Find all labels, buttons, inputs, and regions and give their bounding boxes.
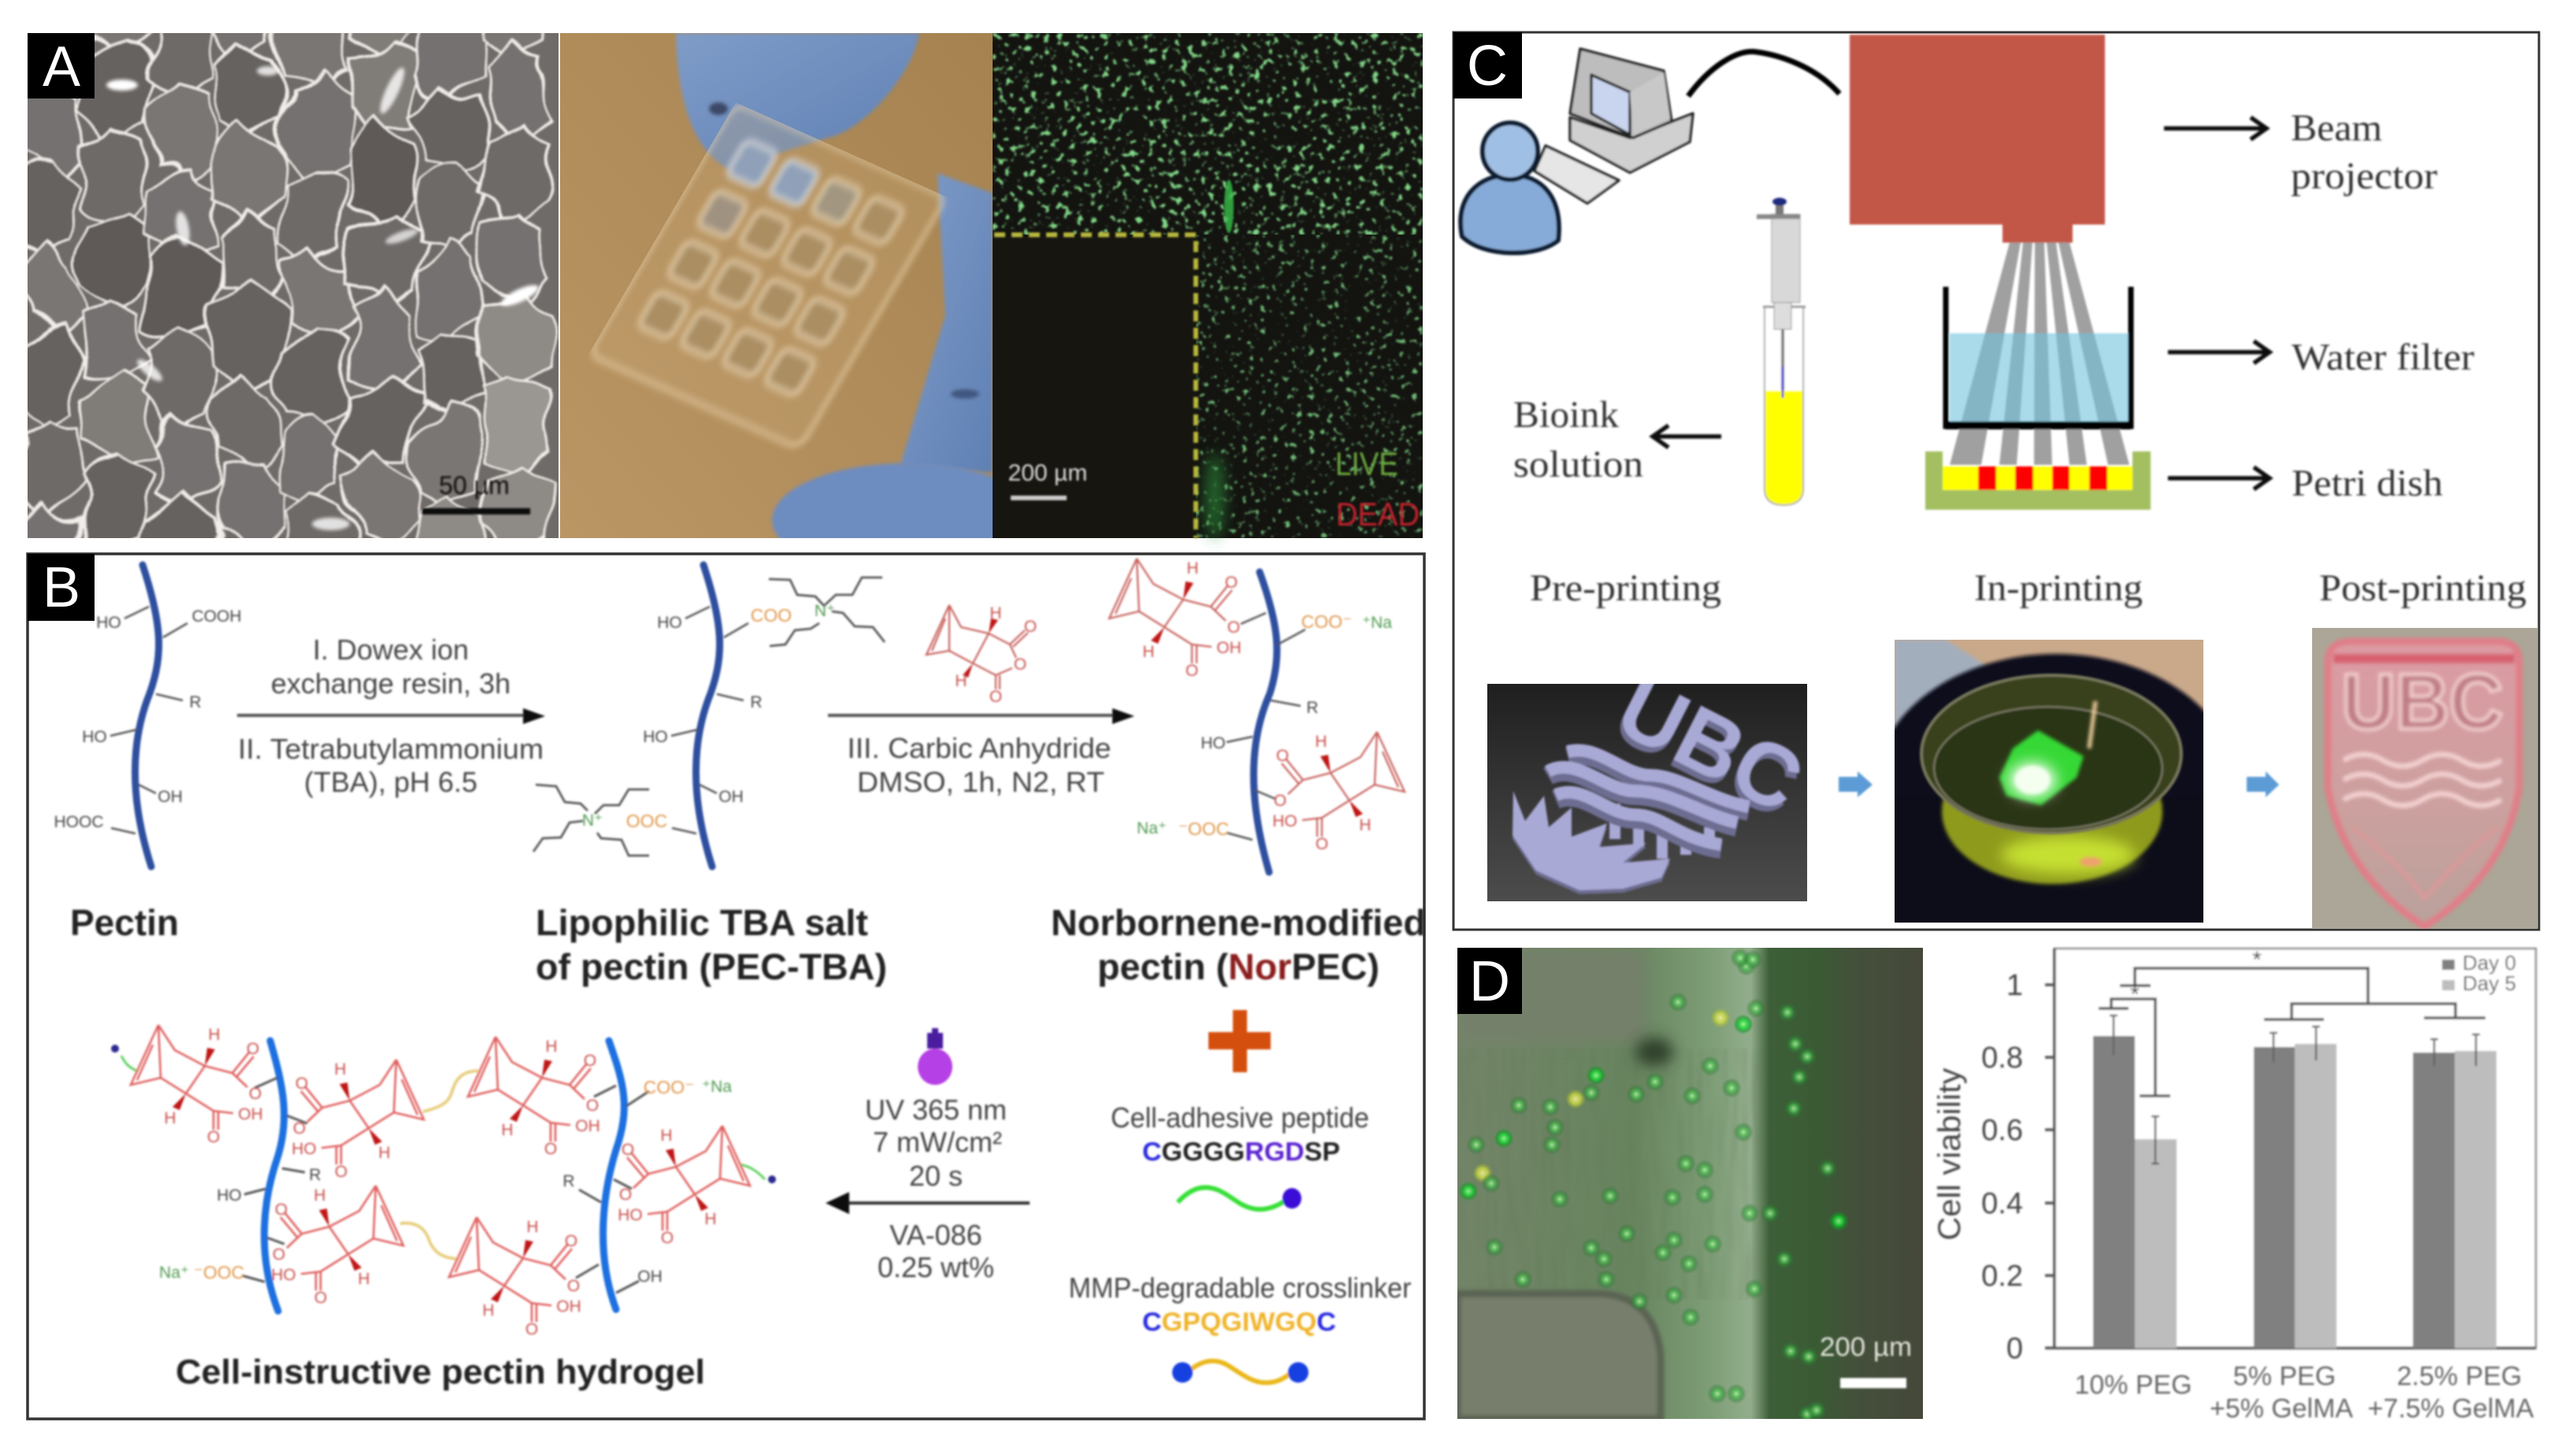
- bars: 2.5% PEG + 7.5% GelMA: [2413, 1051, 2496, 1348]
- pectin chain: [54, 565, 241, 867]
- NorPEC chain: HO: [1201, 734, 1226, 752]
- UV conditions: 7 mW/cm²: [873, 1126, 1002, 1158]
- conditions I and II: [238, 633, 544, 798]
- hydrogel labels 4: O: [619, 1186, 632, 1204]
- side group labels: [159, 1077, 732, 1286]
- MMP-degradable crosslinker: CGPQGIWGQC: [1142, 1307, 1336, 1336]
- MMP-degradable crosslinker: MMP-degradable crosslinker: [1068, 1272, 1412, 1304]
- significance brackets: [2099, 968, 2485, 1096]
- hydrogel molecule 1: [131, 1025, 254, 1130]
- SEM micrograph of hydrogel: [28, 33, 559, 538]
- norbornene labels upper: H: [1142, 643, 1155, 661]
- heading PEC-TBA: [536, 902, 887, 987]
- norbornene labels lower: HO: [1272, 812, 1297, 830]
- pectin chain: OH: [158, 788, 183, 806]
- hydrogel labels 1: H: [164, 1109, 176, 1127]
- reaction arrow 1: [237, 708, 545, 724]
- label D: [1457, 948, 1522, 1014]
- NorPEC chain: Na⁺: [1137, 819, 1167, 837]
- label Petri dish: Petri dish: [2292, 462, 2443, 504]
- label Water filter: Water filter: [2292, 336, 2474, 378]
- arrow to Water filter: [2168, 341, 2270, 363]
- carbic anhydride molecule: [926, 604, 1037, 706]
- icon: UV bulb: [918, 1028, 952, 1085]
- heading PEC-TBA: Lipophilic TBA salt: [536, 902, 868, 943]
- norbornene labels lower: O: [1316, 835, 1328, 853]
- cable: [1688, 52, 1839, 96]
- UV conditions: 20 s: [909, 1160, 963, 1192]
- hydrogel labels 3: O: [586, 1097, 599, 1115]
- category labels: 10% PEG: [2075, 1370, 2192, 1400]
- norbornene labels lower: O: [1274, 792, 1286, 810]
- hydrogel labels 2: [291, 1060, 391, 1181]
- scale label 200 µm: 200 µm: [1008, 460, 1087, 486]
- beam projector: [1850, 35, 2105, 243]
- hydrogel labels 3: [501, 1038, 600, 1158]
- panel B frame: [28, 554, 1424, 1419]
- norbornene molecule lower: [1282, 732, 1405, 837]
- pectin chain: HO: [96, 614, 121, 632]
- hydrogel labels 6: O: [567, 1277, 580, 1295]
- norbornene labels lower: H: [1359, 816, 1372, 834]
- y tick labels: 1: [2006, 969, 2023, 1002]
- side group bonds: [242, 1078, 649, 1293]
- hydrogel labels 3: O: [584, 1052, 596, 1070]
- category labels: [2075, 1361, 2534, 1424]
- scale label 50 µm: [422, 471, 530, 514]
- post-printing UBC shield photo: UBC: [2341, 658, 2504, 746]
- arrow to Beam projector: [2164, 117, 2266, 139]
- side group labels: R: [309, 1166, 321, 1184]
- UV conditions: [865, 1094, 1007, 1283]
- hydrogel labels 5: O: [314, 1289, 327, 1307]
- LIVE / DEAD legend: DEAD: [1336, 496, 1420, 533]
- hydrogel labels 1: O: [249, 1085, 262, 1103]
- hydrogel labels 1: [164, 1026, 263, 1146]
- stage labels: In-printing: [1974, 567, 2143, 609]
- side group labels: ⁻OOC: [194, 1262, 244, 1283]
- panel D: viability: [1457, 947, 2536, 1424]
- error bars: [2110, 1016, 2480, 1164]
- y tick labels: 0.2: [1981, 1260, 2023, 1293]
- backbones: [264, 1041, 624, 1311]
- y tick labels: 0: [2006, 1332, 2023, 1365]
- category labels: 5% PEG: [2233, 1361, 2336, 1391]
- hydrogel labels 6: O: [565, 1232, 577, 1250]
- scale label 200 µm: 200 µm: [1820, 1332, 1912, 1362]
- pectin chain: HOOC: [54, 813, 104, 831]
- norbornene labels lower: O: [1276, 747, 1289, 765]
- norbornene labels lower: [1272, 733, 1372, 853]
- y tick labels: 0.8: [1981, 1042, 2023, 1075]
- side group labels: HO: [217, 1186, 242, 1205]
- NorPEC chain: COO⁻: [1301, 611, 1352, 632]
- y tick labels: [1981, 969, 2023, 1365]
- NorPEC chain: R: [1306, 699, 1319, 717]
- significance stars: *: [2130, 982, 2140, 1008]
- carbic anhydride molecule: O: [1024, 618, 1037, 636]
- hydrogel labels 3: OH: [575, 1117, 600, 1135]
- conditions I and II: II. Tetrabutylammonium: [238, 733, 544, 765]
- live/dead fluorescence image: [993, 33, 1423, 540]
- hydrogel labels 6: O: [525, 1320, 538, 1339]
- heading NorPEC: pectin (NorPEC): [1097, 946, 1379, 987]
- NorPEC chain: ⁻OOC: [1179, 819, 1229, 839]
- condition III: III. Carbic Anhydride: [848, 732, 1111, 764]
- UV conditions: UV 365 nm: [865, 1094, 1007, 1126]
- LIVE / DEAD legend: LIVE: [1335, 445, 1398, 482]
- hydrogel labels 5: H: [314, 1186, 326, 1205]
- carbic anhydride molecule: O: [1014, 655, 1026, 674]
- category labels: +7.5% GelMA: [2368, 1394, 2534, 1424]
- arrow to Bioink solution: [1653, 425, 1721, 447]
- PEC-TBA chain: HO: [657, 614, 682, 632]
- NorPEC chain: [1137, 572, 1392, 872]
- legend: Day 5: [2463, 971, 2516, 995]
- reaction arrow 2: [828, 708, 1134, 724]
- hydrogel molecule 6: [449, 1217, 572, 1322]
- heading Pectin: Pectin: [70, 902, 179, 943]
- pre-printing UBC model render: UBC: [1600, 663, 1815, 837]
- carbic anhydride molecule: H: [989, 604, 1002, 622]
- y axis title: Cell viability: [1932, 1068, 1967, 1240]
- hydrogel labels 2: O: [295, 1075, 308, 1093]
- hydrogel labels 1: H: [208, 1026, 221, 1044]
- category labels: +5% GelMA: [2210, 1394, 2353, 1424]
- bars: 10% PEG: [2093, 1036, 2177, 1348]
- UV conditions: VA-086: [889, 1219, 982, 1251]
- label Beam projector: Beam: [2291, 107, 2382, 149]
- norbornene labels upper: H: [1186, 559, 1199, 577]
- hydrogel labels 4: O: [661, 1229, 674, 1247]
- stage labels: [1530, 567, 2526, 609]
- heading NorPEC: Norbornene-modified: [1051, 902, 1426, 943]
- scale label 200 µm: [1820, 1332, 1912, 1388]
- hydrogel labels 5: H: [358, 1270, 370, 1288]
- icon: user: [1461, 123, 1559, 253]
- hydrogel labels 4: HO: [618, 1206, 643, 1224]
- side group labels: ⁺Na: [702, 1078, 732, 1096]
- hydrogel molecule 5: [280, 1186, 403, 1290]
- UV conditions: 0.25 wt%: [878, 1251, 994, 1283]
- pre-printing UBC model render: [1487, 684, 1807, 901]
- dashed inset outline: [994, 235, 1196, 538]
- plus sign: [1208, 1010, 1271, 1072]
- blue arrow 1: [1839, 771, 1873, 797]
- hydrogel labels 5: O: [275, 1201, 288, 1219]
- legend: [2442, 951, 2516, 995]
- stage labels: Pre-printing: [1530, 567, 1721, 609]
- pectin chain: COOH: [192, 607, 241, 626]
- hydrogel labels 5: [271, 1186, 370, 1307]
- PEC-TBA chain: R: [750, 693, 763, 711]
- NorPEC chain: ⁺Na: [1362, 614, 1392, 632]
- label C: [1453, 32, 1522, 98]
- panel A: microscopy and photo strip: [28, 33, 1423, 547]
- norbornene labels lower: H: [1315, 733, 1327, 751]
- PEC-TBA chain: OH: [718, 788, 744, 806]
- significance stars: *: [2252, 947, 2262, 973]
- panel C frame: [1453, 32, 2539, 930]
- hydrogel labels 2: O: [293, 1120, 306, 1138]
- photo of patterned hydrogel held by gloved hand: [560, 33, 993, 538]
- bars: 5% PEG + 5% GelMA: [2254, 1044, 2337, 1348]
- cell-adhesive peptide: Cell-adhesive peptide: [1111, 1101, 1369, 1134]
- hydrogel labels 3: O: [544, 1140, 557, 1158]
- category labels: 2.5% PEG: [2397, 1361, 2522, 1391]
- y tick labels: 0.6: [1981, 1114, 2023, 1147]
- UV reaction arrow: [826, 1192, 1030, 1214]
- carbic anhydride molecule: O: [989, 688, 1002, 706]
- pipette and tube: [1757, 198, 1806, 505]
- PEC-TBA chain: HO: [643, 728, 668, 746]
- norbornene labels upper: [1142, 559, 1242, 680]
- label A: A: [43, 35, 80, 98]
- side group labels: COO⁻: [644, 1077, 694, 1097]
- in-printing photo of dish: [1895, 640, 2203, 923]
- hydrogel chip with 4x4 wells: [588, 102, 947, 449]
- hydrogel labels 2: H: [334, 1060, 347, 1079]
- arrow to Petri dish: [2168, 467, 2270, 489]
- label B: B: [43, 556, 80, 619]
- label Beam projector: [2291, 107, 2437, 197]
- hydrogel labels 3: H: [545, 1038, 558, 1056]
- post-printing UBC shield photo: [2312, 628, 2537, 929]
- hydrogel labels 4: H: [660, 1127, 673, 1145]
- crosslinkers and peptides: [400, 1071, 478, 1259]
- hydrogel labels 6: H: [526, 1218, 539, 1236]
- norbornene molecule upper: [1109, 559, 1232, 663]
- side group labels: OH: [637, 1268, 663, 1286]
- label Bioink solution: [1513, 394, 1643, 485]
- label Beam projector: projector: [2291, 155, 2437, 197]
- norbornene labels upper: OH: [1216, 639, 1242, 657]
- label A: [28, 33, 95, 98]
- hydrogel labels 4: [618, 1127, 717, 1247]
- scale label 50 µm: 50 µm: [439, 471, 510, 499]
- hydrogel labels 5: O: [273, 1246, 285, 1264]
- label C: C: [1467, 35, 1508, 98]
- cell-adhesive peptide: CGGGGRGDSP: [1142, 1137, 1340, 1166]
- PEC-TBA chain: COO: [751, 605, 792, 626]
- side group labels: Na⁺: [159, 1264, 189, 1282]
- scale label 200 µm: [1008, 460, 1087, 500]
- live/dead brightfield micrograph: [1457, 948, 1923, 1424]
- pectin chain: HO: [82, 728, 107, 746]
- y tick labels: 0.4: [1981, 1187, 2023, 1220]
- hydrogel labels 4: H: [704, 1210, 717, 1228]
- legend: Day 0: [2463, 951, 2516, 975]
- side group labels: R: [562, 1172, 575, 1190]
- pectin chain: R: [189, 693, 202, 711]
- PEC-TBA chain: OOC: [626, 811, 667, 831]
- PEC-TBA chain: N⁺: [815, 602, 835, 620]
- panel B: chemistry scheme: [28, 554, 1426, 1419]
- hydrogel network: [111, 1025, 776, 1339]
- hydrogel labels 6: H: [482, 1302, 495, 1320]
- projected beams: [1950, 243, 2129, 465]
- hydrogel labels 2: O: [335, 1163, 347, 1181]
- heading NorPEC: [1051, 902, 1426, 987]
- norbornene labels upper: O: [1227, 618, 1240, 637]
- stage labels: Post-printing: [2319, 567, 2526, 609]
- conditions I and II: (TBA), pH 6.5: [304, 766, 477, 798]
- hydrogel labels 6: OH: [556, 1298, 581, 1316]
- hydrogel labels 4: O: [622, 1141, 634, 1159]
- conditions I and II: I. Dowex ion: [313, 633, 469, 666]
- significance stars: [2130, 947, 2262, 1008]
- hydrogel labels 1: O: [247, 1040, 259, 1058]
- condition III: [848, 732, 1111, 798]
- hydrogel labels 1: OH: [238, 1105, 263, 1123]
- carbic anhydride molecule: H: [955, 672, 967, 690]
- hydrogel labels 2: H: [378, 1144, 391, 1162]
- label D: D: [1469, 950, 1510, 1013]
- hydrogel molecule 3: [468, 1037, 591, 1142]
- PEC-TBA chain: N⁺: [582, 811, 603, 830]
- hydrogel molecule 4: [627, 1126, 750, 1231]
- water container: [1946, 287, 2131, 426]
- PEC-TBA chain: [533, 565, 885, 867]
- hydrogel labels 6: [482, 1218, 581, 1339]
- hydrogel labels 3: H: [501, 1121, 514, 1139]
- water: [1950, 333, 2129, 422]
- icon: computer: [1535, 49, 1693, 203]
- chart frame and axis: [2045, 949, 2536, 1348]
- heading PEC-TBA: of pectin (PEC-TBA): [536, 946, 887, 987]
- hydrogel labels 1: O: [207, 1128, 220, 1146]
- panel C: bioprinting setup: [1453, 32, 2539, 930]
- bar chart: cell viability: [1932, 947, 2536, 1424]
- norbornene labels upper: O: [1186, 662, 1198, 680]
- label Bioink solution: Bioink: [1513, 394, 1619, 436]
- MMP-degradable crosslinker: [1068, 1272, 1412, 1383]
- pre-printing UBC model render: UBC: [1603, 657, 1818, 832]
- petri dish: [1925, 451, 2151, 510]
- cell-adhesive peptide: [1111, 1101, 1369, 1209]
- hydrogel labels 5: HO: [271, 1266, 296, 1284]
- condition III: DMSO, 1h, N2, RT: [857, 766, 1104, 798]
- conditions I and II: exchange resin, 3h: [271, 667, 510, 700]
- label Bioink solution: solution: [1513, 444, 1643, 485]
- hydrogel labels 2: HO: [291, 1140, 317, 1158]
- hydrogel molecule 2: [301, 1060, 424, 1164]
- LIVE / DEAD legend: [1335, 445, 1420, 533]
- cells: [1458, 948, 1849, 1424]
- norbornene labels upper: O: [1225, 574, 1238, 592]
- heading hydrogel: Cell-instructive pectin hydrogel: [176, 1353, 705, 1391]
- label B: [28, 554, 95, 621]
- blue arrow 2: [2247, 771, 2279, 797]
